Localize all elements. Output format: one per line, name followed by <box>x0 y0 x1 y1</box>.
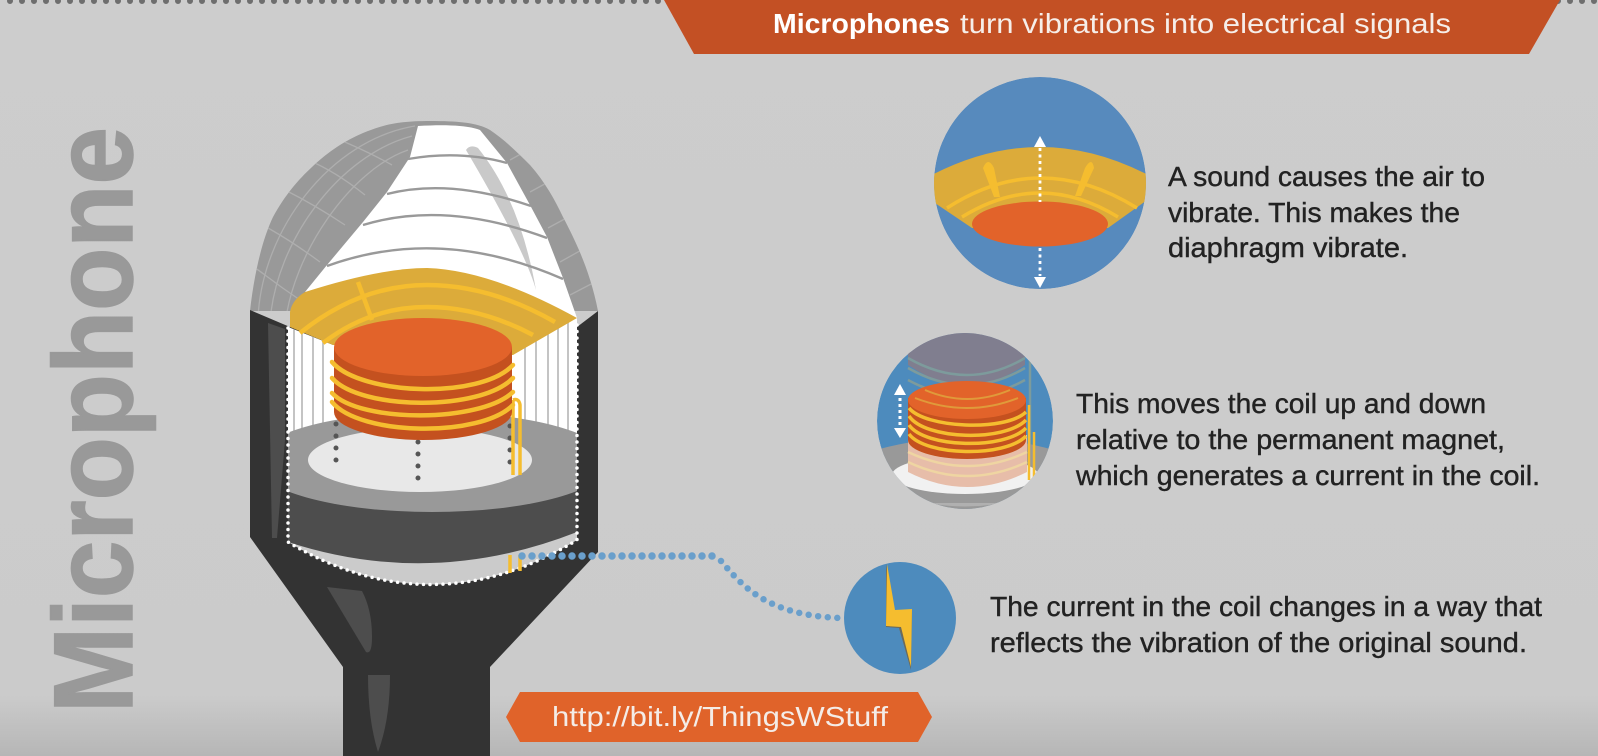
heading banner <box>664 0 1560 54</box>
vertical title: Microphone: Microphone <box>31 127 156 713</box>
heading banner: Microphones <box>773 8 950 39</box>
step 1 text: A sound causes the air to <box>1168 161 1485 192</box>
step 1 text <box>1168 161 1485 263</box>
step 2 text: This moves the coil up and down <box>1076 388 1486 419</box>
mesh grille dome <box>250 121 598 326</box>
lead wires <box>510 400 520 573</box>
microphone body <box>250 310 598 756</box>
callout circle 3: electrical signal <box>844 562 956 674</box>
white inner cone <box>305 125 577 318</box>
microphone illustration <box>250 121 610 756</box>
step 1 text: vibrate. This makes the <box>1168 197 1460 228</box>
step 3 text: The current in the coil changes in a way that <box>990 591 1542 622</box>
body highlights <box>268 323 390 752</box>
step 3 text: reflects the vibration of the original sound. <box>990 627 1527 658</box>
heading banner: turn vibrations into electrical signals <box>960 8 1451 39</box>
signal dotted cable <box>522 556 840 618</box>
top dotted border <box>10 0 1598 4</box>
callout circle 2: coil moves <box>877 333 1053 509</box>
step 2 text: which generates a current in the coil. <box>1075 460 1540 491</box>
cavity dotted edge <box>288 320 577 585</box>
callout circle 1: diaphragm vibrates <box>930 77 1150 289</box>
step 1 text: diaphragm vibrate. <box>1168 232 1408 263</box>
source link badge: http://bit.ly/ThingsWStuff <box>552 701 888 732</box>
step 3 text <box>990 591 1542 658</box>
icon: lightning bolt <box>886 564 912 670</box>
yellow diaphragm <box>290 268 577 355</box>
step 2 text: relative to the permanent magnet, <box>1076 424 1505 455</box>
open cavity with stripes <box>288 318 577 585</box>
source link badge <box>506 692 932 742</box>
step 2 text <box>1075 388 1540 491</box>
voice coil <box>332 318 513 440</box>
permanent magnet <box>288 417 577 564</box>
